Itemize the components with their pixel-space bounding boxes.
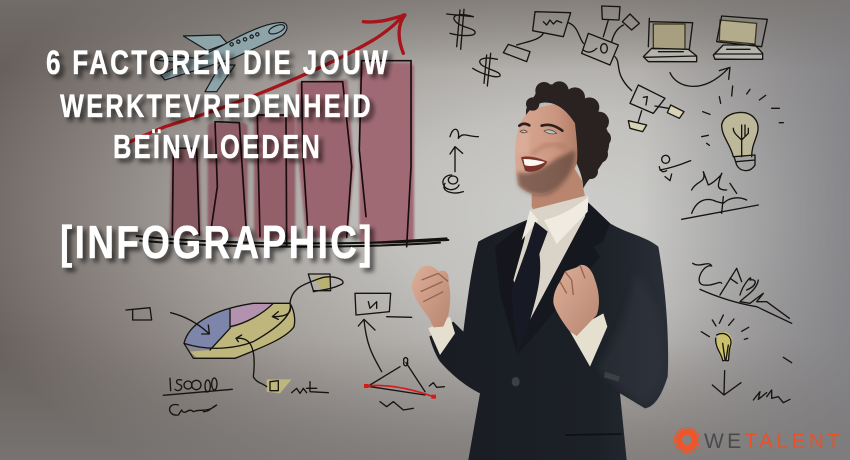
title line 2: WERKTEVREDENHEID	[60, 88, 373, 124]
chart axis	[137, 236, 448, 247]
triangle diagram	[355, 293, 444, 410]
tie	[512, 222, 548, 353]
laptops	[653, 24, 685, 49]
small bulb	[715, 332, 732, 363]
plane	[155, 23, 287, 92]
down arrow	[712, 371, 790, 403]
light bulb	[722, 112, 758, 157]
curved arrow	[670, 67, 730, 86]
right fist	[553, 265, 599, 336]
man in suit cheering	[412, 81, 668, 460]
logo: WeTalent	[674, 428, 840, 453]
left fist	[412, 266, 450, 327]
subtitle: [INFOGRAPHIC]	[60, 216, 374, 268]
sketch: pie chart and triangle	[126, 274, 444, 415]
title	[46, 44, 390, 268]
sketch: scribble, small bulb and down arrow	[693, 263, 792, 403]
stubble	[517, 150, 575, 195]
sleeve highlights	[597, 273, 662, 403]
collar	[522, 197, 588, 244]
bar outlines	[172, 61, 411, 247]
mouth	[521, 157, 547, 172]
buttons and pocket	[512, 372, 620, 386]
ear	[576, 144, 601, 175]
handwritten figures	[163, 378, 232, 415]
doodle notes	[443, 129, 758, 219]
cuffs	[428, 313, 607, 367]
dollar signs	[447, 9, 500, 86]
title line 3: BEÏNVLOEDEN	[113, 128, 322, 165]
bars	[169, 63, 414, 243]
title line 1: 6 FACTOREN DIE JOUW	[46, 44, 390, 82]
sketch: bar chart with plane and red arrow	[130, 15, 448, 247]
lapels	[517, 203, 610, 355]
red growth arrow	[130, 15, 405, 142]
face	[515, 103, 587, 195]
suit	[429, 203, 668, 460]
shirt	[513, 195, 588, 320]
signature scribble	[693, 263, 792, 323]
flow diagram	[628, 105, 684, 132]
pie chart	[184, 303, 295, 358]
neck	[532, 167, 585, 220]
logo wordmark: WETALENT	[704, 430, 840, 453]
pie annotations	[313, 277, 330, 288]
hair	[526, 81, 611, 188]
sketch: dollars, flow diagram, laptops, light bulb	[443, 6, 783, 219]
logo mark	[674, 428, 700, 452]
nose and cheek shading	[516, 130, 529, 154]
eyes and brows	[519, 124, 562, 131]
